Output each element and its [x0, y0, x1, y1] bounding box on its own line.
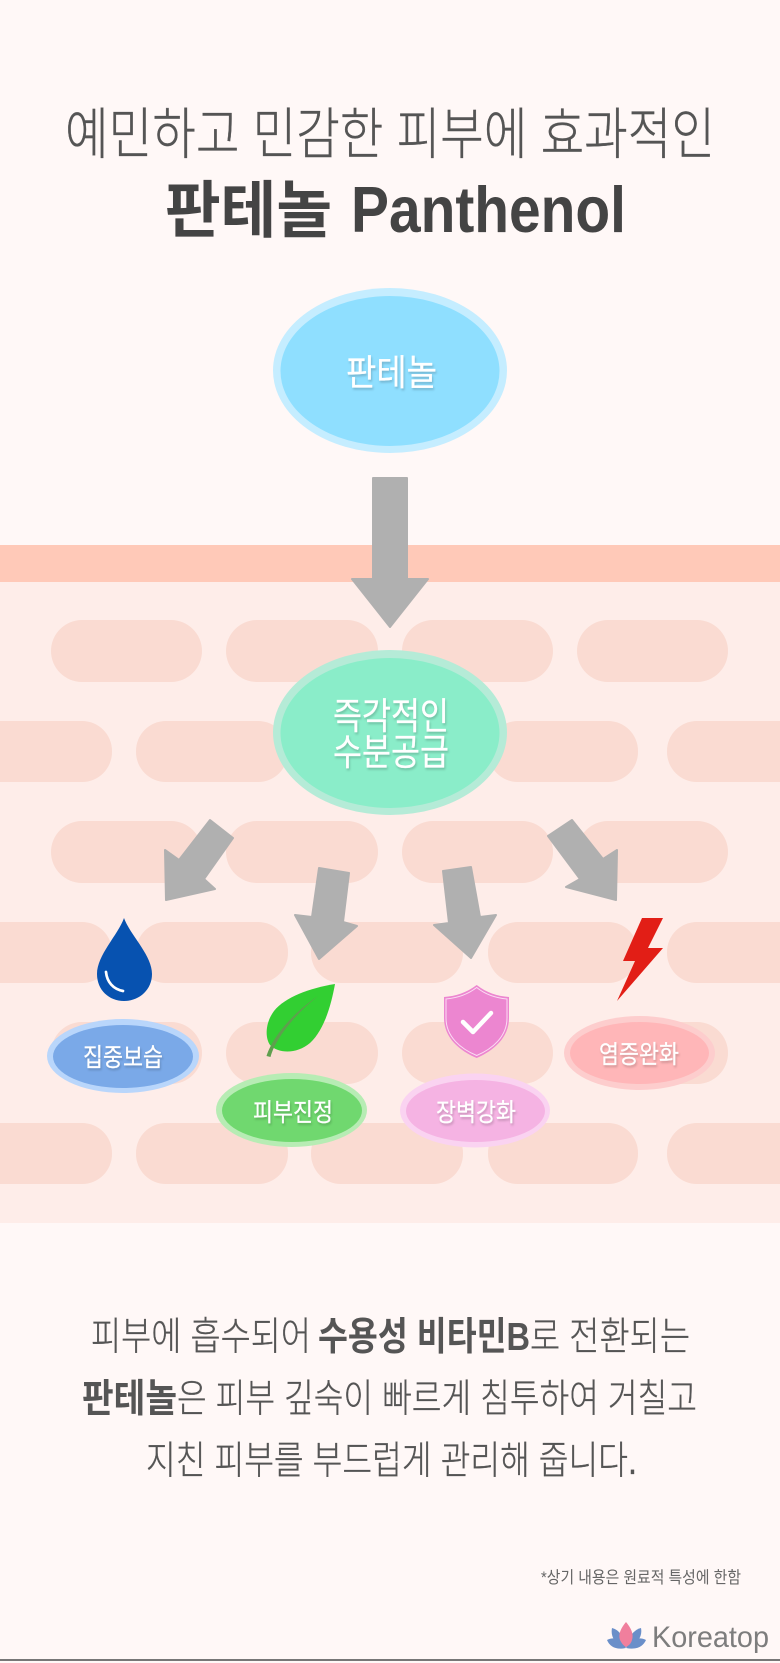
arrow: panthenol to hydration: [352, 478, 428, 627]
label: concentrated moisture: [47, 1019, 199, 1093]
title: Panthenol: [351, 173, 626, 246]
node: instant hydration: [273, 650, 507, 815]
title: [65, 103, 715, 246]
node: panthenol: 판테놀: [346, 352, 437, 393]
label: skin soothing: 피부진정: [253, 1099, 333, 1127]
icon: leaf: [266, 984, 335, 1057]
icon: water drop: [97, 918, 152, 1001]
label: inflammation relief: 염증완화: [599, 1041, 679, 1069]
node: instant hydration: 수분공급: [333, 732, 449, 773]
label: concentrated moisture: 집중보습: [83, 1044, 163, 1072]
description text: 판테놀: [82, 1378, 177, 1421]
description text: 지친 피부를 부드럽게 관리해 줍니다.: [146, 1440, 637, 1483]
logo: Koreatop: Koreatop: [652, 1621, 769, 1654]
panel: skin layer: [0, 545, 780, 1223]
description text: 피부에 흡수되어: [91, 1316, 311, 1359]
icon: lightning: [617, 918, 663, 1001]
footnote: *상기 내용은 원료적 특성에 한함: [541, 1568, 741, 1587]
label: barrier strengthening: [400, 1074, 550, 1148]
description text: 수용성 비타민B: [318, 1316, 530, 1359]
label: skin soothing: [216, 1073, 367, 1147]
icon: shield: [444, 985, 509, 1058]
description text: [82, 1316, 697, 1483]
node: panthenol: [273, 288, 507, 453]
title: 판테놀: [165, 177, 332, 246]
arrows: four benefits: [165, 820, 617, 959]
node: instant hydration: 즉각적인: [333, 696, 449, 737]
label: barrier strengthening: 장벽강화: [436, 1099, 516, 1127]
description text: 로 전환되는: [530, 1316, 690, 1359]
label: inflammation relief: [564, 1016, 715, 1090]
